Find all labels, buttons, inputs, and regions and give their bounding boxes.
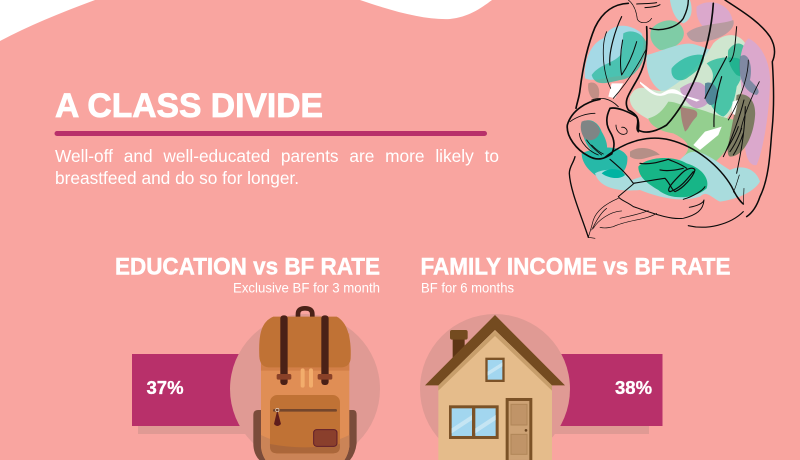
bar: education 37%: 37% [146, 377, 184, 398]
illustration: mother holding baby [567, 0, 775, 238]
subheading: education: Exclusive BF for 3 month [233, 280, 380, 296]
white top wave [0, 0, 492, 41]
bar: income 38% [555, 354, 662, 426]
title underline [54, 131, 487, 136]
circle behind backpack [230, 314, 380, 460]
heading: education vs BF rate: EDUCATION vs BF RATE [115, 254, 380, 280]
bar shadow: education [138, 426, 248, 434]
bar shadow: income [550, 426, 649, 434]
icon: house [425, 315, 565, 460]
title: A CLASS DIVIDE [55, 87, 323, 125]
bar: income 38%: 38% [615, 377, 652, 398]
line art [567, 0, 775, 238]
subheading: income: BF for 6 months [421, 280, 514, 296]
circle behind house [420, 314, 570, 460]
icon: backpack [253, 308, 357, 460]
bar: education 37% [132, 354, 242, 426]
heading: family income vs BF rate: FAMILY INCOME vs BF RATE [420, 254, 730, 280]
colour blobs [581, 0, 770, 202]
body text: Well-off and well-educated parents are more likely to breastfeed and do so for longer. [55, 146, 499, 188]
